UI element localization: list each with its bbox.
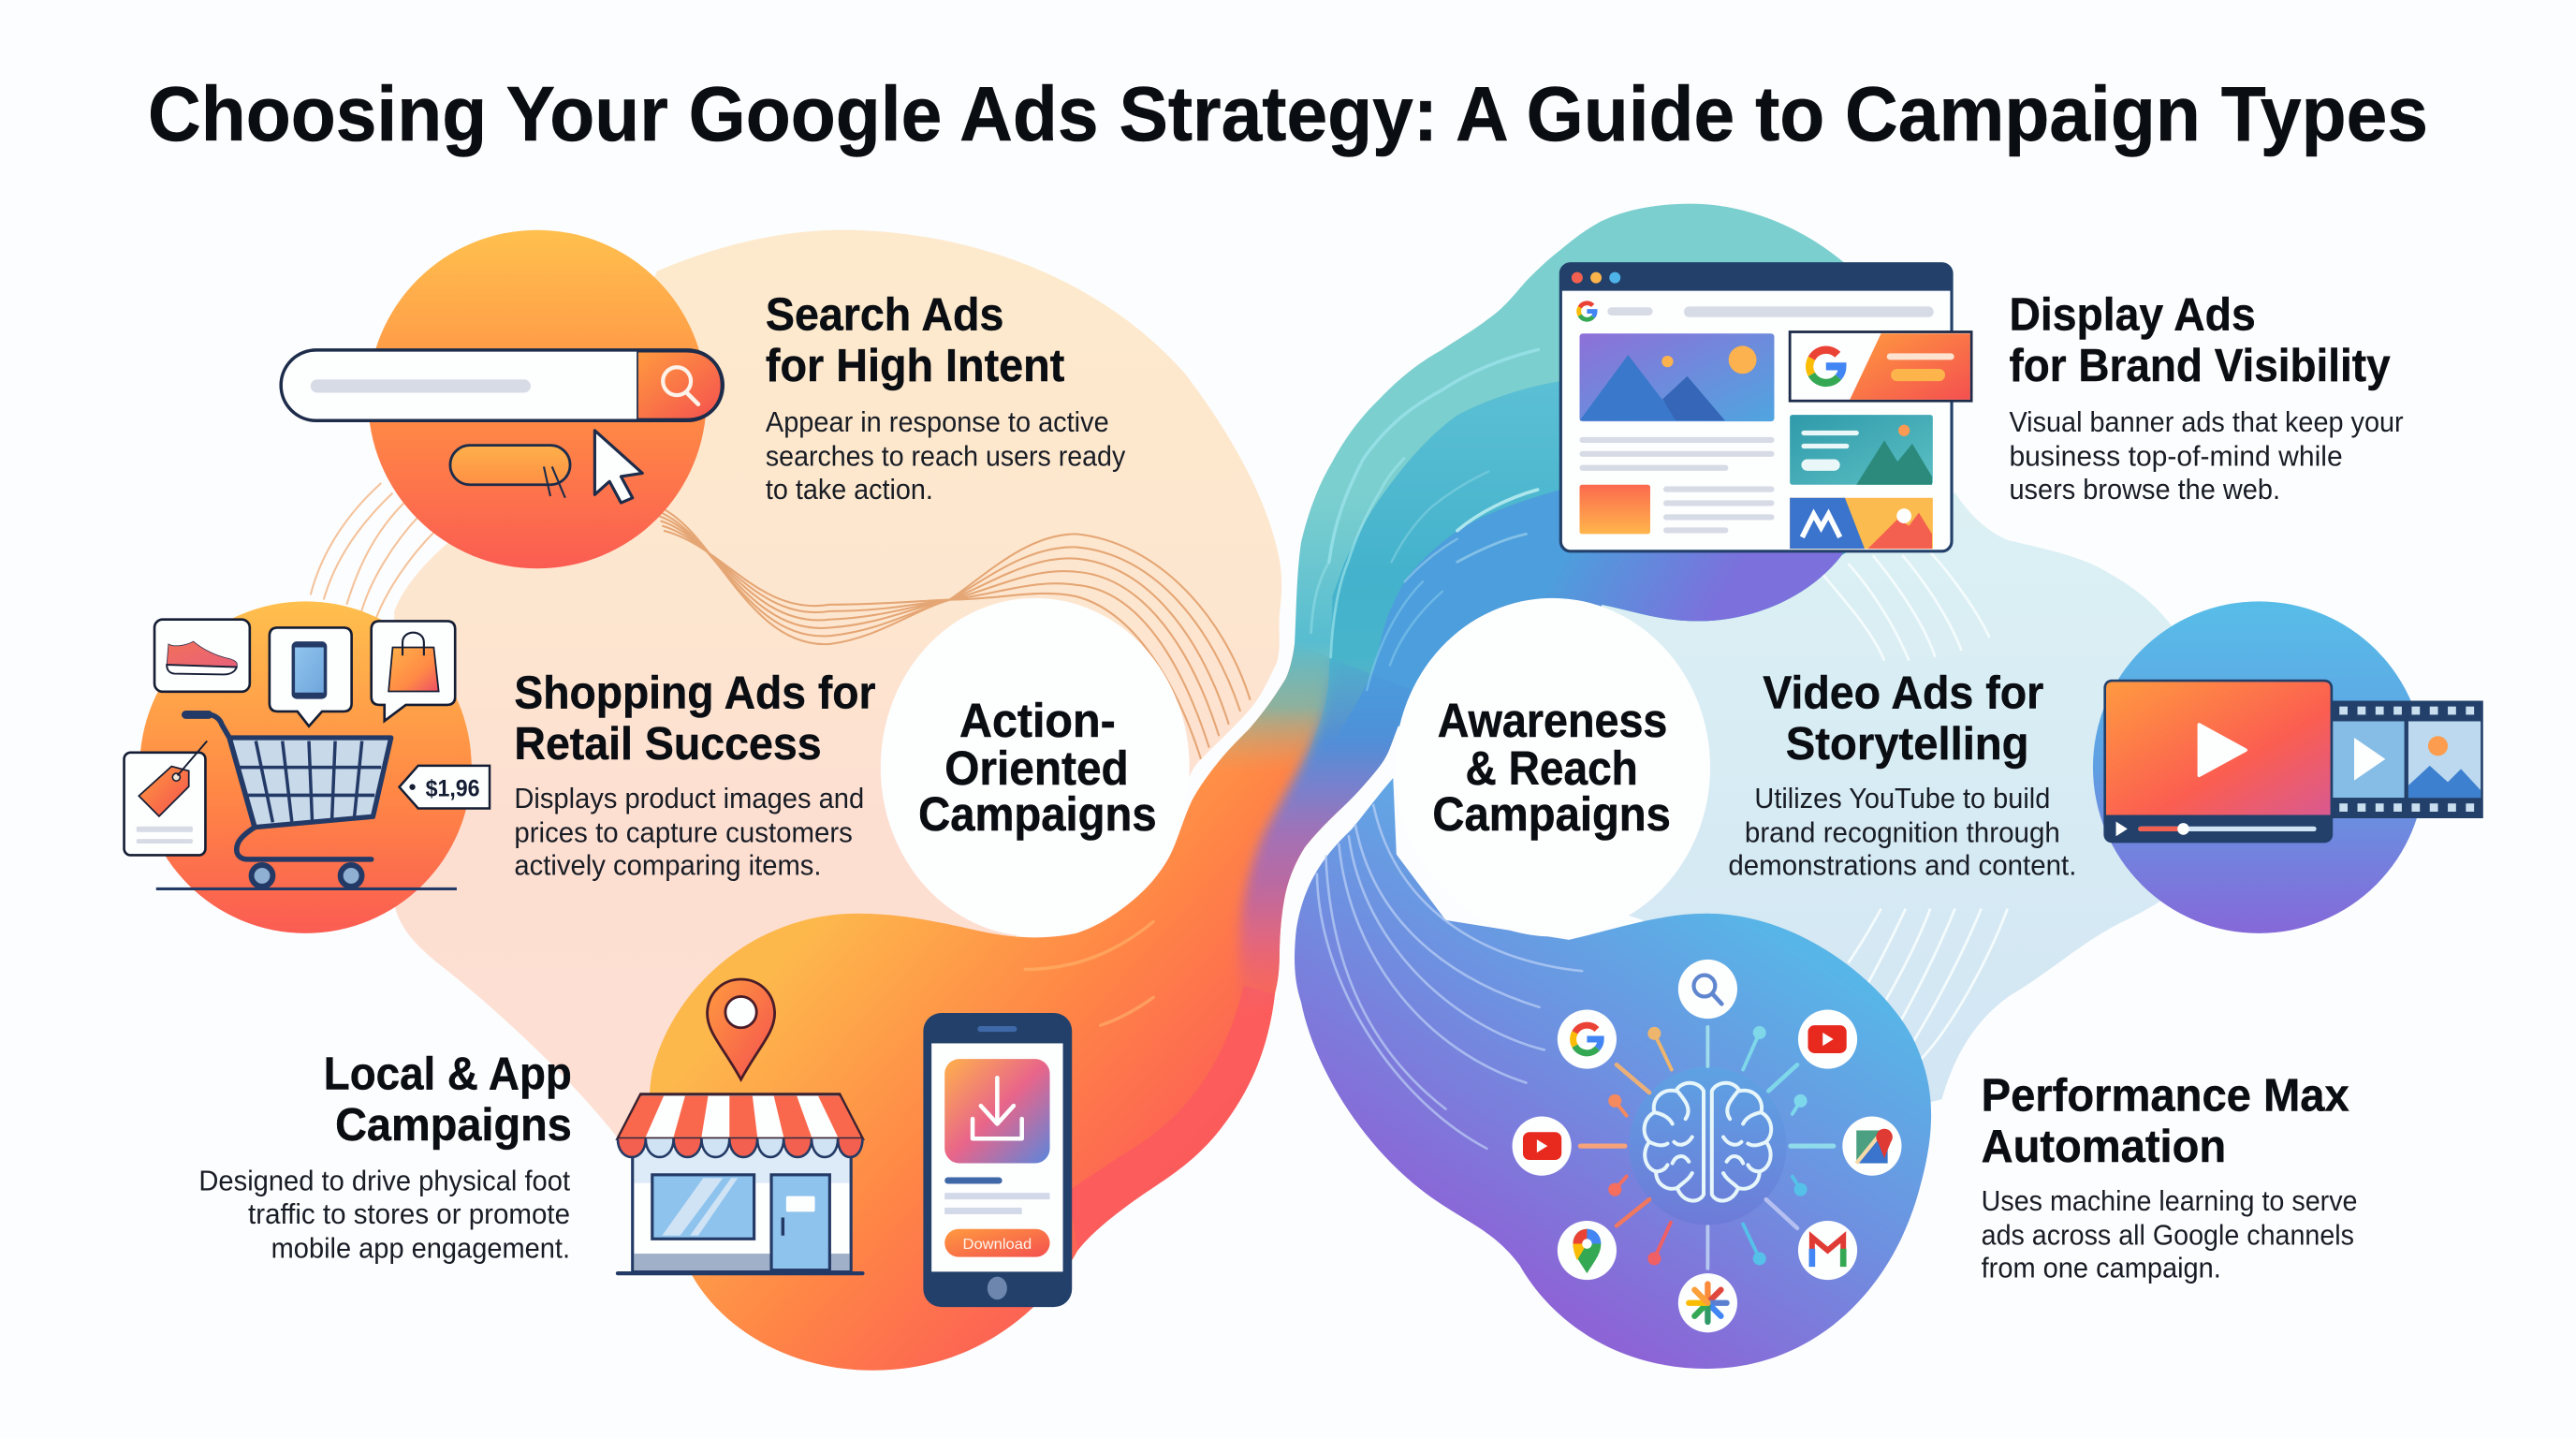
heading: search ads: for High Intent [766, 341, 1064, 391]
icon: phone with download: Download [963, 1237, 1032, 1253]
body: performance max: Uses machine learning to serve [1982, 1184, 2358, 1217]
icon: teal ad card [1790, 415, 1933, 485]
icon: search bar [281, 350, 723, 420]
icon: phone with download [923, 1013, 1072, 1307]
body: shopping ads [514, 782, 864, 882]
purple blob [1295, 778, 1931, 1369]
group label: awareness and reach: Campaigns [1432, 787, 1671, 841]
body: performance max: ads across all Google channels [1982, 1219, 2354, 1252]
decorative wave lines [657, 506, 1251, 759]
group label: awareness and reach [1432, 694, 1671, 841]
icon: video circle [2093, 601, 2424, 933]
icon: photos channel [1678, 1273, 1737, 1332]
icon: maps image channel [1842, 1117, 1902, 1176]
panel: video ads [1728, 601, 2483, 933]
body: local and app: mobile app engagement. [271, 1232, 570, 1265]
heading: display ads: Display Ads [2009, 290, 2256, 341]
title: Choosing Your Google Ads Strategy: A Guide to Campaign Types [148, 71, 2428, 157]
group label: awareness and reach: & Reach [1466, 741, 1638, 795]
body: search ads: Appear in response to active [766, 405, 1109, 438]
panel: performance max [1513, 960, 2358, 1332]
icon: storefront [618, 1094, 862, 1273]
orange blob red edge band [1068, 986, 1275, 1251]
group label: action oriented: Action- [959, 694, 1116, 747]
body: performance max: from one campaign. [1982, 1252, 2221, 1284]
icon: search channel [1678, 960, 1737, 1019]
icon: pointer button [450, 446, 570, 498]
icon: video player [2103, 680, 2333, 843]
icon: phone bubble [270, 627, 352, 726]
heading: local and app [324, 1049, 572, 1151]
icon: shoe card [154, 620, 250, 692]
body: video ads: Utilizes YouTube to build [1754, 782, 2050, 814]
icon: youtube channel left [1513, 1117, 1572, 1176]
body: display ads: users browse the web. [2009, 473, 2280, 506]
group circle: action oriented [881, 598, 1190, 936]
heading: local and app: Campaigns [335, 1100, 572, 1151]
backdrop: pale action blob [393, 230, 1281, 1147]
group label: action oriented: Campaigns [918, 787, 1157, 841]
group label: action oriented: Oriented [944, 741, 1129, 795]
body: display ads: business top-of-mind while [2009, 440, 2343, 473]
body: local and app: traffic to stores or promote [248, 1197, 570, 1230]
heading: video ads [1763, 668, 2043, 770]
icon: google channel [1558, 1009, 1617, 1069]
decorative arcs: left [311, 483, 435, 618]
heading: performance max: Performance Max [1982, 1070, 2349, 1121]
body: shopping ads: Displays product images and [514, 782, 864, 814]
body: search ads: to take action. [766, 473, 933, 506]
heading: shopping ads [514, 668, 875, 770]
body: search ads: searches to reach users ready [766, 440, 1126, 473]
icon: google banner ad [1790, 332, 1971, 401]
body: shopping ads: prices to capture customers [514, 816, 853, 849]
heading: shopping ads: Retail Success [514, 719, 822, 770]
body: video ads: demonstrations and content. [1728, 849, 2076, 882]
icon: bag bubble [372, 621, 455, 721]
icon: price label [400, 766, 490, 808]
body: local and app [198, 1165, 570, 1265]
icon: search circle [368, 230, 707, 568]
icon: browser window [1560, 264, 1952, 551]
backdrop: pale awareness blob [1429, 493, 2234, 1151]
body: display ads [2009, 405, 2404, 506]
icon: image ad card [1790, 498, 1933, 549]
icon: price tag card [124, 741, 207, 855]
teal inner band [1298, 361, 1889, 808]
icon: mouse cursor [594, 431, 642, 503]
icon: shopping circle [139, 601, 472, 933]
body: video ads: brand recognition through [1745, 816, 2060, 849]
heading: display ads: for Brand Visibility [2009, 341, 2391, 391]
icon: youtube channel right [1798, 1009, 1857, 1069]
group circle: awareness [1395, 598, 1710, 936]
panel: search ads [281, 230, 1126, 568]
heading: performance max [1982, 1070, 2349, 1172]
body: performance max [1982, 1184, 2358, 1284]
ground line [156, 888, 457, 889]
heading: video ads: Storytelling [1786, 719, 2029, 770]
panel: display ads [1560, 264, 2404, 551]
body: shopping ads: actively comparing items. [514, 849, 822, 882]
orange blob and ribbon [650, 644, 1412, 1371]
heading: search ads: Search Ads [766, 290, 1003, 341]
decorative arcs: right [1822, 552, 2008, 1060]
heading: local and app: Local & App [324, 1049, 572, 1100]
icon: map pin [708, 979, 775, 1079]
body: search ads [766, 405, 1126, 506]
body: display ads: Visual banner ads that keep your [2009, 405, 2404, 438]
icon: shopping cart [185, 714, 391, 887]
heading: performance max: Automation [1982, 1122, 2226, 1172]
teal blob and ribbon [1193, 204, 1903, 808]
heading: video ads: Video Ads for [1763, 668, 2043, 718]
ribbon right strand blend [1235, 669, 1405, 994]
blue inner band [1323, 477, 1889, 808]
icon: ai hub [1629, 1067, 1787, 1225]
heading: display ads [2009, 290, 2391, 391]
icon: google maps channel [1558, 1221, 1617, 1280]
group label: awareness and reach: Awareness [1438, 694, 1667, 747]
icon: gmail channel [1798, 1221, 1857, 1280]
purple blob light lines [1317, 805, 1582, 1149]
panel: local and app [198, 979, 1072, 1307]
icon: price label: $1,96 [426, 776, 480, 801]
group label: action oriented [918, 694, 1157, 841]
body: video ads [1728, 782, 2076, 882]
icon: film strip [2324, 701, 2483, 818]
ribbon light lines [1311, 349, 1538, 690]
panel: shopping ads [124, 601, 875, 933]
spokes [1580, 1026, 1834, 1269]
heading: shopping ads: Shopping Ads for [514, 668, 875, 718]
heading: search ads [766, 290, 1064, 391]
body: local and app: Designed to drive physical foot [198, 1165, 570, 1197]
orange blob highlights [1025, 922, 1153, 1025]
